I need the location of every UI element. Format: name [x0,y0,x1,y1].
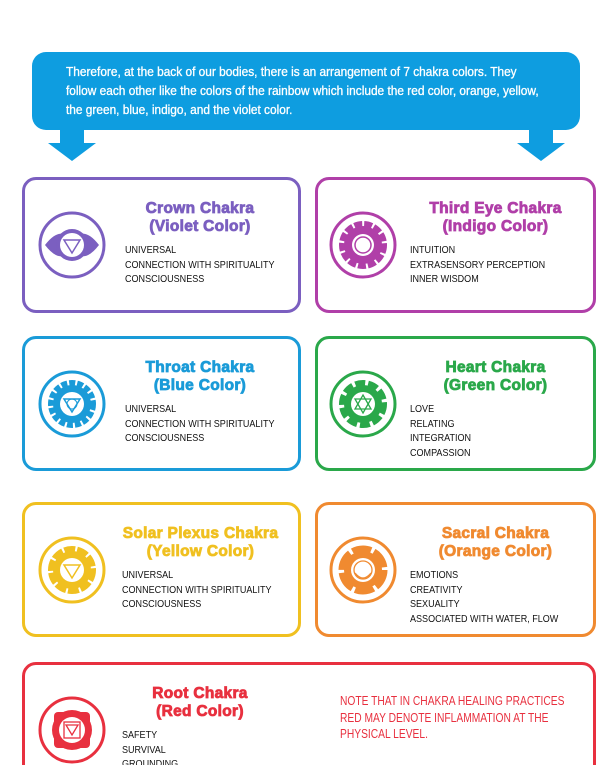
items [122,729,178,765]
title: Sacral Chakra [442,525,549,542]
icon: solar plexus [38,536,106,604]
panel: solar plexus chakra [22,502,301,637]
title: Root Chakra [152,685,248,702]
icon: sacral [330,536,396,604]
items: CREATIVITY [410,584,463,596]
panel: crown chakra [22,177,301,313]
items [410,569,558,624]
items [410,244,545,285]
items: EXTRASENSORY PERCEPTION [410,258,545,270]
title: (Blue Color) [154,377,246,394]
items [122,569,272,610]
title: (Orange Color) [439,543,552,560]
items: INTEGRATION [410,432,471,444]
items: EMOTIONS [410,569,458,581]
banner: intro [32,52,580,130]
items: CONSCIOUSNESS [125,432,204,444]
items: INNER WISDOM [410,273,479,285]
items: RELATING [410,418,454,430]
icon: crown [38,212,106,278]
items: CONNECTION WITH SPIRITUALITY [125,418,275,430]
items: INTUITION [410,244,455,256]
items [410,403,471,458]
title: Throat Chakra [146,359,254,376]
items [125,244,275,285]
title [444,359,547,394]
title [122,525,278,560]
items: UNIVERSAL [125,403,176,415]
panel: root chakra [22,662,596,765]
items: SEXUALITY [410,598,460,610]
items: SAFETY [122,729,157,741]
title: (Green Color) [444,377,547,394]
items: CONSCIOUSNESS [122,598,201,610]
items: UNIVERSAL [125,244,176,256]
icon: throat [38,370,106,438]
items: CONNECTION WITH SPIRITUALITY [125,258,275,270]
arrow: left [48,130,96,161]
items: LOVE [410,403,434,415]
title: (Yellow Color) [147,543,254,560]
title: Solar Plexus Chakra [123,525,278,542]
note: RED MAY DENOTE INFLAMMATION AT THE [340,710,548,724]
arrow: right [517,130,565,161]
note: NOTE THAT IN CHAKRA HEALING PRACTICES [340,694,564,708]
icon: third eye [330,212,396,278]
banner: intro: Therefore, at the back of our bodies, there is an arrangement of 7 chakra colors. They [66,65,517,79]
items: ASSOCIATED WITH WATER, FLOW [410,612,558,624]
title [146,200,254,235]
icon: heart [330,370,396,438]
banner: intro: the green, blue, indigo, and the violet color. [66,103,292,117]
note: PHYSICAL LEVEL. [340,727,428,741]
title: Heart Chakra [445,359,546,376]
title: (Red Color) [156,703,244,720]
title [429,200,562,235]
items: SURVIVAL [122,744,166,756]
items: COMPASSION [410,446,471,458]
panel: third eye chakra [315,177,596,313]
panel: throat chakra [22,336,301,471]
title [439,525,552,560]
title: Third Eye Chakra [429,200,562,217]
items: CONNECTION WITH SPIRITUALITY [122,584,272,596]
items [125,403,275,444]
title: (Indigo Color) [443,218,548,235]
title [145,359,255,394]
items: CONSCIOUSNESS [125,273,204,285]
panel: sacral chakra [315,502,596,637]
note [340,694,564,741]
title: Crown Chakra [146,200,254,217]
items: UNIVERSAL [122,569,173,581]
title [152,685,248,720]
panel: heart chakra [315,336,596,471]
title: (Violet Color) [149,218,251,235]
icon: root [38,696,106,764]
banner: intro: follow each other like the colors of the rainbow which include the red color, orange, yellow, [66,84,539,98]
